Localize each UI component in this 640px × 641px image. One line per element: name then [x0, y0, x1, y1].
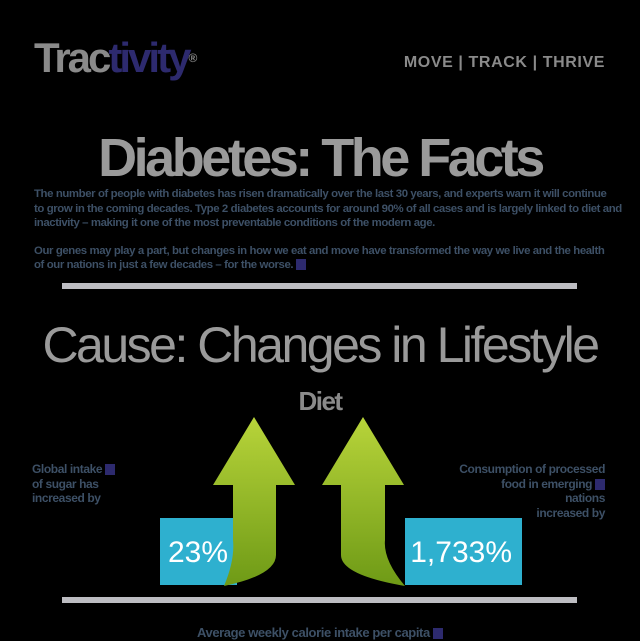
right stat text: food in emerging [501, 476, 592, 490]
right stat text: nations [565, 491, 605, 505]
intro text: Our genes may play a part, but changes in how we eat and move have transformed the way we live and the health [34, 244, 604, 256]
box: 23%: 23% [168, 536, 228, 569]
title: Diabetes: The Facts [98, 128, 542, 188]
right stat text: increased by [536, 506, 605, 520]
right stat text [459, 462, 606, 520]
left stat text: Global intake [32, 462, 102, 476]
divider [62, 597, 577, 603]
bottom text: Average weekly calorie intake per capita [197, 625, 430, 640]
left stat text: increased by [32, 491, 101, 505]
box: 1,733% [405, 518, 522, 585]
box: 1,733%: 1,733% [410, 536, 512, 569]
intro text [34, 188, 622, 271]
intro text: The number of people with diabetes has risen dramatically over the last 30 years, and experts warn it will continue [34, 188, 606, 200]
right stat text: Consumption of processed [459, 462, 605, 476]
box: 23% [160, 518, 237, 585]
arrow: right [322, 417, 405, 586]
intro text: to grow in the coming decades. Type 2 diabetes accounts for around 90% of all cases and is largely linked to diet and [34, 202, 622, 214]
left stat text [32, 462, 115, 505]
arrow: left [213, 417, 295, 586]
section heading: Cause: Changes in Lifestyle [42, 317, 598, 373]
intro text: inactivity – making it one of the most preventable conditions of the modern age. [34, 217, 435, 229]
logo: Tractivity® [34, 34, 194, 81]
intro text: of our nations in just a few decades – for the worse. [34, 259, 293, 271]
nav: MOVE | TRACK | THRIVE [404, 54, 605, 71]
divider [62, 283, 577, 289]
left stat text: of sugar has [32, 476, 99, 490]
subheading: diet: Diet [298, 386, 342, 416]
